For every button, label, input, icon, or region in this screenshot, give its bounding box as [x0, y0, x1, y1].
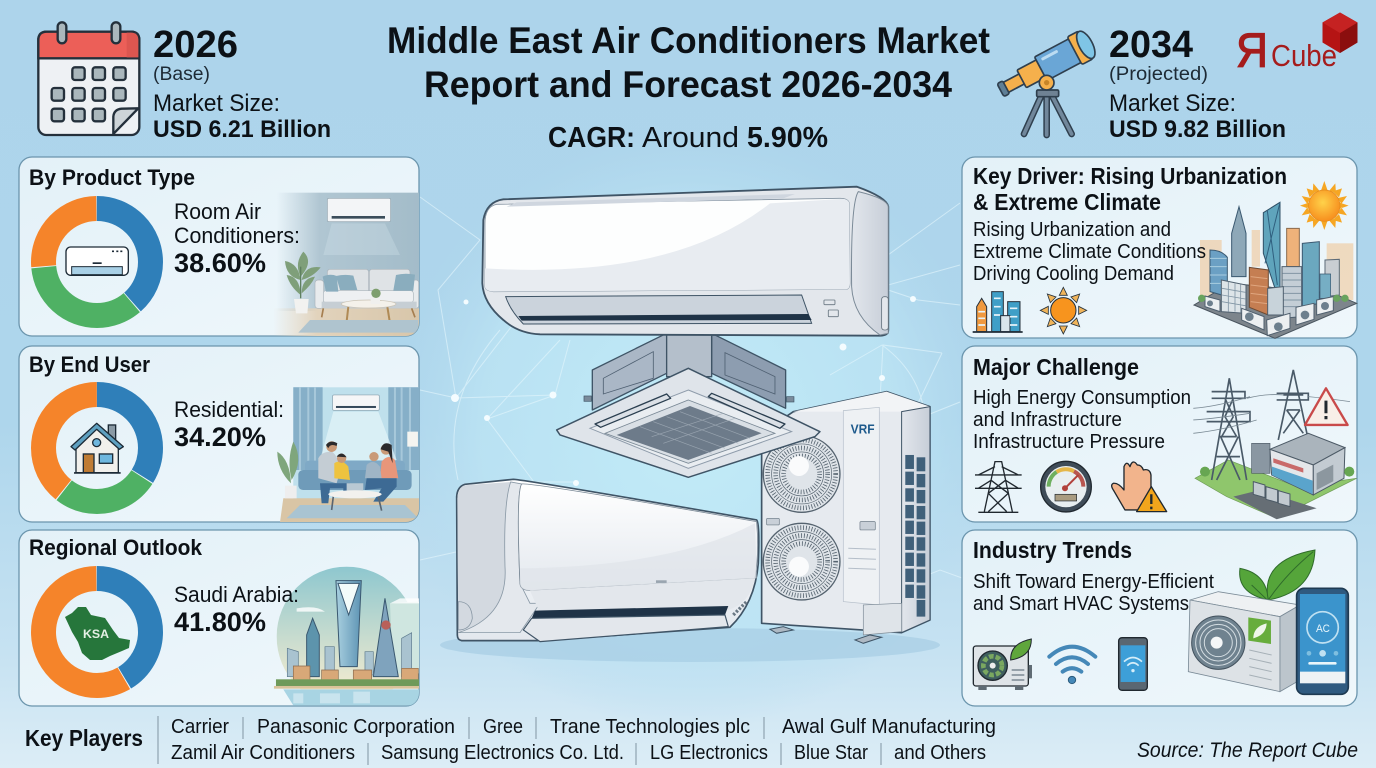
heading: key driver	[973, 163, 1287, 215]
stat: 2034 projected: 2034	[1109, 24, 1193, 66]
text: challenge description	[973, 387, 1191, 453]
icon: transmission tower	[975, 462, 1022, 512]
heading: by end user: By End User	[29, 352, 150, 377]
floor shadow	[440, 628, 940, 662]
fan: lower	[763, 523, 840, 600]
key players	[25, 716, 996, 765]
stat: 2034 projected: USD 9.82 Billion	[1109, 116, 1286, 143]
icon: calendar	[38, 22, 139, 135]
network pattern behind products	[420, 197, 962, 590]
donut chart: region	[44, 578, 150, 686]
illustration: city with outdoor units and sun	[1194, 181, 1357, 338]
list: companies: Panasonic Corporation	[257, 716, 455, 738]
label: room air conditioners: Room Air	[174, 199, 261, 224]
icon: gauge	[1041, 461, 1091, 512]
stat: 2026 base: USD 6.21 Billion	[153, 116, 331, 143]
logo: RCube: Cube	[1271, 38, 1337, 73]
stat: 2026 base: Market Size:	[153, 90, 280, 117]
value: 34.20%: 34.20%	[174, 422, 266, 452]
icon: air conditioner	[66, 247, 128, 275]
heading: key driver: & Extreme Climate	[973, 189, 1161, 215]
text: trends description	[973, 571, 1214, 615]
list: companies: Blue Star	[794, 742, 868, 764]
heading: key players: Key Players	[25, 725, 143, 751]
illustration: living room	[273, 193, 420, 337]
CAGR line: Around	[642, 122, 739, 154]
illustration: VRF outdoor unit	[762, 392, 930, 643]
list: companies: Carrier	[171, 716, 229, 738]
panel: by end user	[19, 346, 420, 522]
list: companies: Trane Technologies plc	[550, 716, 750, 738]
panel: major challenge	[962, 346, 1357, 522]
list: companies	[171, 716, 996, 764]
icon: house	[71, 423, 123, 473]
panel: key driver	[962, 157, 1357, 338]
heading: regional outlook: Regional Outlook	[29, 535, 203, 560]
heading: major challenge: Major Challenge	[973, 354, 1139, 380]
label: residential: Residential:	[174, 397, 284, 422]
donut chart: end user	[44, 394, 150, 502]
illustration: Riyadh skyline	[274, 567, 421, 705]
text: challenge description: and Infrastructure	[973, 409, 1122, 431]
stat: 2034 projected: Market Size:	[1109, 90, 1236, 117]
icon: Saudi Arabia map: KSA	[83, 629, 109, 641]
icon: Saudi Arabia map	[65, 607, 130, 660]
illustration: family under air conditioner	[277, 387, 420, 522]
heading: industry trends: Industry Trends	[973, 537, 1132, 563]
text: trends description: Shift Toward Energy-Efficient	[973, 571, 1214, 593]
network nodes	[451, 296, 916, 486]
stat: 2026 base	[153, 24, 331, 143]
icon: smartphone wifi	[1119, 638, 1147, 690]
panel: by product type: Conditioners:	[174, 223, 300, 248]
value: 41.80%: 41.80%	[174, 607, 266, 637]
title	[387, 20, 990, 105]
list: companies: Gree	[483, 716, 523, 738]
text: challenge description: Infrastructure Pressure	[973, 431, 1165, 453]
panel: regional outlook	[19, 530, 421, 706]
icon: eco outdoor unit	[973, 639, 1032, 690]
label: Saudi Arabia: Saudi Arabia:	[174, 582, 299, 607]
title: Middle East Air Conditioners Market	[387, 20, 990, 61]
CAGR line: 5.90%	[747, 122, 828, 154]
text: key driver description: Driving Cooling Demand	[973, 263, 1174, 285]
CAGR line: CAGR:	[548, 122, 635, 154]
list: companies: Samsung Electronics Co. Ltd.	[381, 742, 624, 764]
panel: industry trends	[962, 530, 1357, 706]
heading: by product type: By Product Type	[29, 165, 195, 190]
CAGR line	[548, 122, 828, 154]
illustration: floor-standing split unit	[457, 479, 759, 642]
text: challenge description: High Energy Consumption	[973, 387, 1191, 409]
list: companies: LG Electronics	[650, 742, 768, 764]
value: 38.60%: 38.60%	[174, 248, 266, 278]
title: Report and Forecast 2026-2034	[424, 64, 952, 105]
illustration: wall-mounted split unit	[482, 187, 888, 336]
list: companies: Zamil Air Conditioners	[171, 742, 355, 764]
logo: RCube: Я	[1236, 25, 1268, 78]
stat: 2034 projected	[1109, 24, 1286, 143]
illustration: smart outdoor unit with leaves and phone	[1188, 550, 1348, 694]
panel: by product type	[19, 157, 420, 337]
stat: 2034 projected: (Projected)	[1109, 64, 1208, 85]
heading: key driver: Key Driver: Rising Urbanization	[973, 163, 1287, 189]
illustration: power lines and facility	[1193, 370, 1357, 519]
logo: RCube	[1236, 12, 1358, 78]
fan: upper	[763, 436, 840, 512]
list: companies: and Others	[894, 742, 986, 764]
text: key driver description: Extreme Climate Conditions	[973, 241, 1206, 263]
icon: wifi	[1049, 647, 1095, 684]
text: key driver description: Rising Urbanization and	[973, 219, 1171, 241]
list: companies: Awal Gulf Manufacturing	[782, 716, 996, 738]
source: Source: The Report Cube	[1137, 739, 1358, 762]
stat: 2026 base: (Base)	[153, 64, 210, 85]
stat: 2026 base: 2026	[153, 24, 238, 66]
illustration: VRF outdoor unit: VRF	[851, 422, 875, 436]
icon: city	[973, 292, 1023, 332]
illustration: ceiling cassette	[557, 333, 820, 477]
icon: sun	[1040, 287, 1087, 334]
text: trends description: and Smart HVAC Systems	[973, 593, 1189, 615]
donut chart: product type	[44, 208, 150, 316]
illustration: smart outdoor unit with leaves and phone: AC	[1316, 623, 1330, 635]
icon: telescope	[993, 28, 1099, 135]
text: key driver description	[973, 219, 1206, 285]
icon: stop hand with warning	[1112, 462, 1167, 512]
